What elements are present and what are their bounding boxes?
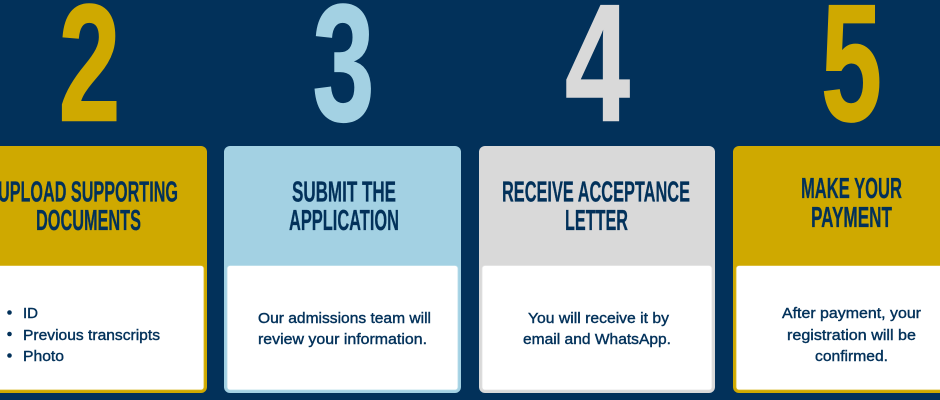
heading: upload supporting documents: DOCUMENTS	[36, 205, 141, 237]
text: payment description	[782, 305, 921, 365]
card header: payment	[733, 146, 940, 393]
card header: submit	[224, 146, 461, 393]
heading: upload supporting documents: UPLOAD SUPPORTING	[0, 176, 178, 208]
text: delivery description: email and WhatsApp.	[523, 331, 671, 348]
list: required documents: Previous transcripts	[23, 327, 160, 344]
text: review description	[258, 310, 431, 348]
panel: submit the application	[224, 146, 461, 393]
heading: receive acceptance letter: RECEIVE ACCEPTANCE	[502, 176, 690, 208]
list: required documents	[7, 305, 160, 365]
heading: upload supporting documents	[0, 176, 178, 237]
heading: submit the application	[289, 176, 399, 237]
text: delivery description: You will receive it by	[528, 310, 670, 327]
text: payment description: registration will be	[787, 327, 916, 344]
card header: upload	[0, 146, 207, 393]
card header: receive	[479, 146, 715, 393]
card body: receive	[482, 266, 712, 390]
heading: make your payment	[801, 173, 902, 234]
text: payment description: After payment, your	[782, 305, 921, 322]
text: review description: review your information.	[258, 331, 427, 348]
list: required documents: Photo	[23, 348, 64, 365]
list: required documents: ID	[23, 305, 38, 322]
card body: submit	[227, 266, 458, 390]
card body: payment	[736, 266, 940, 390]
heading: submit the application: SUBMIT THE	[292, 176, 396, 208]
text: review description: Our admissions team will	[258, 310, 431, 327]
text: delivery description	[523, 310, 671, 348]
heading: submit the application: APPLICATION	[289, 205, 399, 237]
text: payment description: confirmed.	[815, 348, 888, 365]
heading: receive acceptance letter: LETTER	[565, 205, 628, 237]
panel: upload supporting documents	[0, 146, 207, 393]
heading: receive acceptance letter	[502, 176, 690, 237]
card body: upload	[0, 266, 204, 390]
panel: receive acceptance letter	[479, 146, 715, 393]
panel: make your payment	[733, 146, 940, 393]
